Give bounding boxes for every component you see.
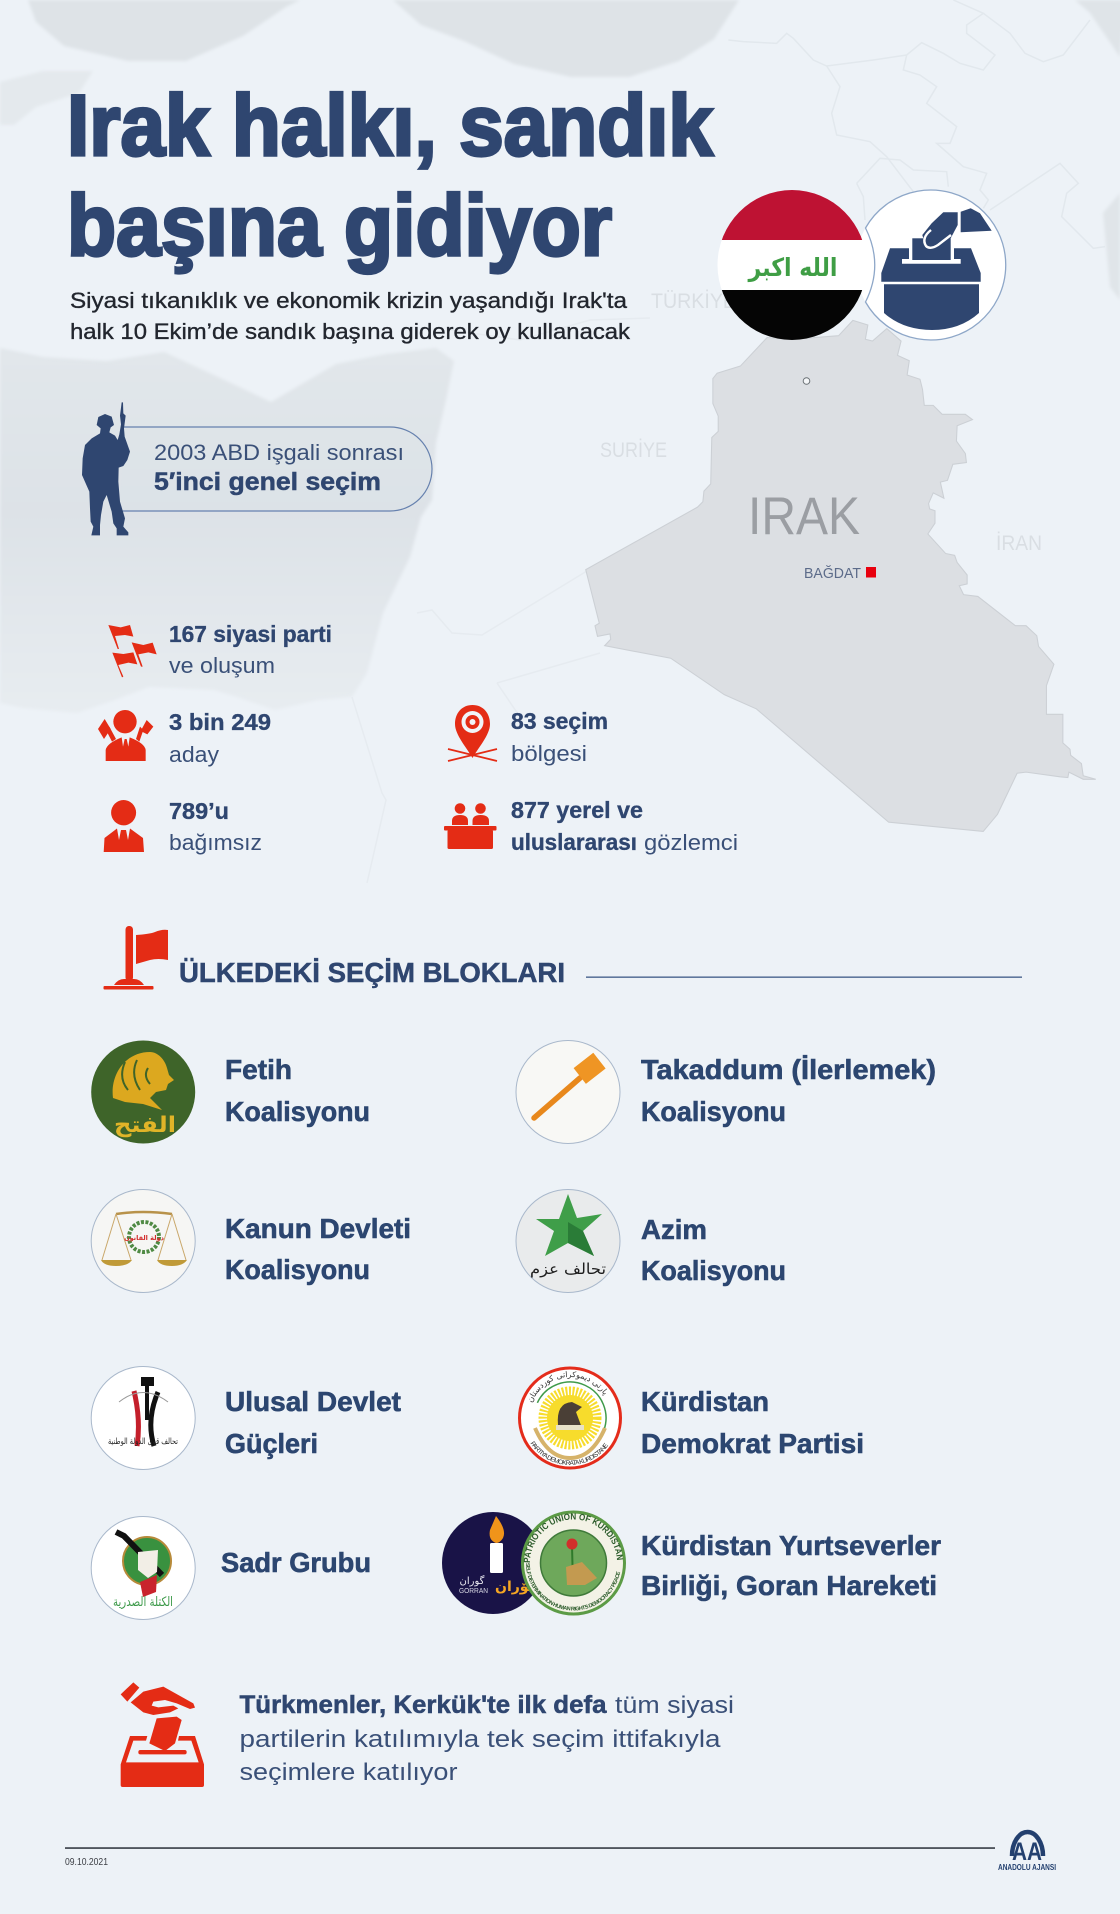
logo: Gorran: GORRAN <box>459 1586 488 1595</box>
bloc: Kürdistan Demokrat Partisi: Kürdistan <box>641 1386 769 1417</box>
footer date: 09.10.2021 <box>65 1857 108 1868</box>
flag inscription: الله اكبر <box>747 253 838 283</box>
note: Turkmens in Kirkuk: partilerin katılımıyla tek seçim ittifakıyla <box>240 1726 721 1753</box>
section heading: election blocs <box>104 926 1022 990</box>
bloc: Sadr Grubu <box>91 1516 371 1620</box>
note: Turkmens in Kirkuk: tüm siyasi <box>615 1692 734 1719</box>
Baghdad marker: BAĞDAT <box>804 565 861 582</box>
logo: Patriotic Union of Kurdistan: PATRIOTIC UNION OF KURDISTAN <box>524 1513 624 1562</box>
stat: 789 independents: 789’u <box>169 798 229 824</box>
bloc: Takaddum: Koalisyonu <box>641 1096 786 1127</box>
bloc: Kanun Devleti <box>91 1190 411 1292</box>
logo: Anadolu Ajansı <box>998 1832 1056 1872</box>
logo: Sadr <box>91 1516 195 1620</box>
title: başına gidiyor <box>67 178 612 274</box>
Iraq label: IRAK <box>748 487 860 546</box>
logo: Fetih <box>91 1040 195 1144</box>
logo: scales: دولة القانون <box>124 1234 165 1242</box>
bloc: Kürdistan Yurtseverler Birliği, Goran Hareketi: Kürdistan Yurtseverler <box>641 1530 941 1561</box>
logo: Anadolu Ajansı: AA <box>1012 1838 1042 1866</box>
icon: red flag on stand <box>104 926 168 990</box>
subtitle: halk 10 Ekim’de sandık başına giderek oy kullanacak <box>70 319 631 344</box>
stat: 167 parties <box>108 621 332 678</box>
bloc: Azim: Azim <box>641 1214 707 1245</box>
icon: ballot box circle <box>856 190 1006 340</box>
bloc: Kürdistan Yurtseverler Birliği, Goran Hareketi <box>442 1510 941 1616</box>
country labels on map <box>600 290 1042 555</box>
country labels on map: TÜRKİYE <box>651 290 736 313</box>
note: Turkmens in Kirkuk: seçimlere katılıyor <box>240 1759 458 1786</box>
bloc: Fetih Koalisyonu: Fetih <box>225 1054 292 1085</box>
logo: Anadolu Ajansı: ANADOLU AJANSI <box>998 1862 1056 1872</box>
stat: 877 observers: 877 yerel ve <box>511 797 643 823</box>
note: Turkmens in Kirkuk <box>121 1682 734 1787</box>
icon: observer desk <box>444 803 496 849</box>
bloc: Kürdistan Demokrat Partisi: Demokrat Partisi <box>641 1428 864 1459</box>
stat: 3249 candidates: 3 bin 249 <box>169 709 271 735</box>
stat: 83 electoral districts: 83 seçim <box>511 708 608 734</box>
logo: Patriotic Union of Kurdistan <box>521 1510 626 1616</box>
stat: 877 observers: gözlemci <box>644 830 738 855</box>
country labels on map: İRAN <box>996 532 1042 555</box>
bloc: Azim: Koalisyonu <box>641 1255 786 1286</box>
bloc: Kanun Devleti: Kanun Devleti <box>225 1213 411 1244</box>
bloc: Ulusal Devlet Güçleri <box>91 1366 401 1470</box>
stat: 83 electoral districts: bölgesi <box>511 741 587 766</box>
logo: National State Forces: تحالف قوى الدولة الوطنية <box>108 1437 178 1447</box>
icon: red ballot box <box>121 1682 204 1787</box>
stat: 83 electoral districts <box>448 705 608 766</box>
logo: National State Forces <box>91 1366 195 1470</box>
logo: scales <box>91 1190 195 1292</box>
stat: 3249 candidates: aday <box>169 742 219 767</box>
stat: 877 observers <box>444 797 738 855</box>
icon: soldier <box>82 402 130 535</box>
bloc: Azim <box>516 1190 786 1292</box>
logo: KDP <box>518 1366 622 1470</box>
stat: 877 observers: uluslararası <box>511 829 637 855</box>
bloc: Fetih Koalisyonu <box>91 1040 370 1144</box>
icon: Iraqi flag circle <box>716 188 869 342</box>
bloc: Ulusal Devlet Güçleri: Ulusal Devlet <box>225 1386 401 1417</box>
logo: KDP: پارتی دیموکراتی کوردستان <box>529 1371 608 1402</box>
stat: 167 parties: ve oluşum <box>169 653 275 678</box>
bloc: Kürdistan Demokrat Partisi <box>518 1366 864 1470</box>
logo: Fetih: الفتح <box>114 1113 176 1138</box>
stat: 167 parties: 167 siyasi parti <box>169 621 332 647</box>
stat: 789 independents <box>104 798 262 855</box>
bloc: Kürdistan Yurtseverler Birliği, Goran Hareketi: Birliği, Goran Hareketi <box>641 1570 937 1601</box>
bloc: Fetih Koalisyonu: Koalisyonu <box>225 1096 370 1127</box>
section heading: election blocs: ÜLKEDEKİ SEÇİM BLOKLARI <box>179 957 565 988</box>
logo: Gorran: گوران <box>460 1575 485 1587</box>
logo: Patriotic Union of Kurdistan: SELF DETERMINATION HUMAN RIGHTS DEMOCRACY PEACE <box>526 1563 620 1610</box>
logo: Takaddum gavel <box>516 1040 620 1144</box>
logo: Azim star <box>516 1190 620 1292</box>
map: Iraq <box>586 320 1096 831</box>
stat: 789 independents: bağımsız <box>169 830 262 855</box>
bloc: Takaddum: Takaddum (İlerlemek) <box>641 1054 936 1085</box>
logo: Gorran <box>442 1512 544 1614</box>
stat: 3249 candidates <box>98 709 271 767</box>
logo: Sadr: الكتلة الصدرية <box>113 1595 173 1610</box>
note: Turkmens in Kirkuk: Türkmenler, Kerkük'te ilk defa <box>240 1691 608 1719</box>
bloc: Sadr Grubu: Sadr Grubu <box>221 1547 371 1578</box>
callout: fifth general election: 5′inci genel seçim <box>154 468 381 496</box>
icon: candidate with flags <box>98 710 153 761</box>
title <box>67 78 713 274</box>
callout: fifth general election: 2003 ABD işgali sonrası <box>154 440 404 465</box>
title: Irak halkı, sandık <box>67 78 713 174</box>
subtitle: Siyasi tıkanıklık ve ekonomik krizin yaşandığı Irak'ta <box>70 288 628 313</box>
bloc: Kanun Devleti: Koalisyonu <box>225 1254 370 1285</box>
logo: KDP: PARTIYA DEMOKRATA KURDISTANE <box>530 1441 608 1466</box>
subtitle <box>70 288 631 344</box>
icon: location pin <box>448 705 497 761</box>
logo: Azim star: تحالف عزم <box>530 1260 606 1278</box>
country labels on map: SURİYE <box>600 439 667 462</box>
icon: person <box>104 800 144 852</box>
callout: fifth general election <box>82 402 432 535</box>
Kirkuk dot <box>803 378 810 384</box>
icon: flags <box>108 625 157 677</box>
footer rule <box>65 1847 995 1849</box>
bloc: Ulusal Devlet Güçleri: Güçleri <box>225 1428 318 1459</box>
logo: Gorran: کۆران <box>495 1579 538 1595</box>
bloc: Takaddum <box>516 1040 936 1144</box>
